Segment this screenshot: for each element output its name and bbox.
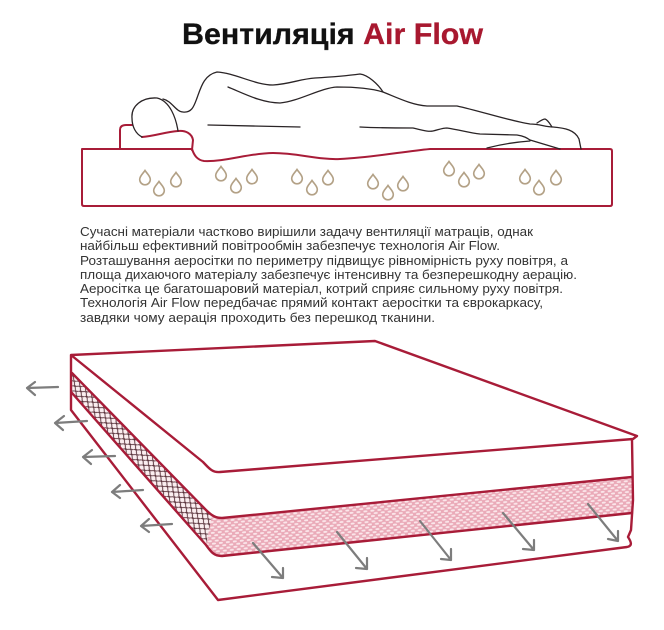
description text block <box>80 225 577 325</box>
description text block: Технологія Air Flow передбачає прямий контакт аеросітки та єврокаркасу, <box>80 296 543 310</box>
description text block: найбільш ефективний повітрообмін забезпечує технологія Air Flow. <box>80 239 500 253</box>
left arrows <box>27 382 172 532</box>
sleeping body outline <box>132 72 581 149</box>
head <box>132 98 178 137</box>
mattress with body contour <box>82 149 612 206</box>
description text block: Аеросітка це багатошаровий матеріал, котрий сприяє сильному руху повітря. <box>80 282 563 296</box>
diagram: mattress with air flow <box>27 341 637 600</box>
mesh borders <box>72 373 632 556</box>
mesh layer, front <box>206 477 632 556</box>
description text block: Розташування аеросітки по периметру підвищує рівномірність руху повітря, а <box>80 254 568 268</box>
description text block: Сучасні матеріали частково вирішили задачу вентиляції матраців, однак <box>80 225 534 239</box>
mesh layer, side <box>72 373 222 547</box>
down arrows <box>253 504 618 578</box>
arm and leg line <box>228 87 581 149</box>
lower leg <box>360 127 560 149</box>
mattress outline <box>71 341 637 600</box>
description text block: завдяки чому аерація проходить без перешкод тканини. <box>80 311 435 325</box>
title: Вентиляція Air Flow <box>182 18 484 51</box>
diagram: sleeper on mattress <box>82 72 612 206</box>
heel <box>537 119 552 127</box>
description text block: площа дихаючого матеріалу забезпечує інтенсивну та безперешкодну аерацію. <box>80 268 577 282</box>
arm line <box>208 125 300 127</box>
back and shoulders <box>163 72 383 112</box>
air drops <box>140 162 561 200</box>
pillow <box>120 125 193 150</box>
